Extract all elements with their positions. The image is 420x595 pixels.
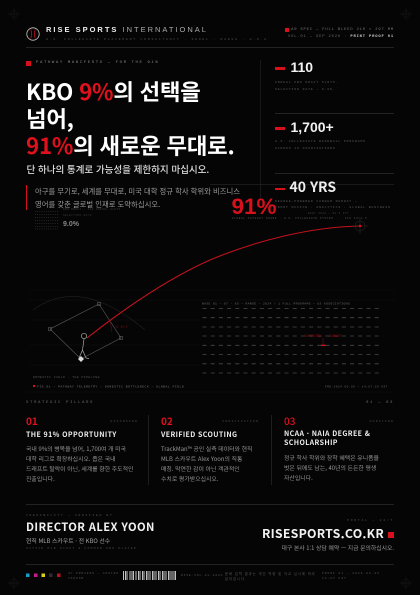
title: KBO 9%의 선택을 [26, 75, 201, 107]
heading left: STRATEGIC PILLARS [26, 401, 94, 405]
body [284, 452, 379, 482]
name: DIRECTOR ALEX YOON [26, 519, 155, 535]
subtitle: 단 하나의 통계로 가능성을 제한하지 마십시오. [26, 162, 209, 176]
description: U.S. COLLEGIATE BASEBALL PROGRAMS [275, 139, 366, 143]
body: 대학 리그로 확장하십시오. 좁은 국내 [26, 454, 116, 463]
diamond [48, 302, 122, 359]
trajectory curve [87, 226, 360, 338]
highlighted label: GOMPUTEL · 91%LOT [304, 334, 342, 338]
footer: process note: 4C PROCESS — COATED [68, 572, 119, 574]
heading: VERIFIED SCOUTING [161, 430, 237, 440]
body: 수치로 평가받으십시오. [161, 474, 218, 483]
footer: serial: RISE-VOL.01-2026 [181, 574, 223, 576]
body: 벗은 뒤에도 남는, 40년의 든든한 평생 [284, 463, 376, 472]
heading: NCAA · NAIA DEGREE & [284, 429, 370, 439]
role korean: 현직 MLB 스카우트 · 전 KBO 선수 [26, 536, 110, 544]
body: 국내 9%의 병목을 넘어, 1,700여 개 미국 [26, 444, 126, 452]
figure caption: FIG.01 — PATHWAY TELEMETRY : DOMESTIC BOTTLENECK → GLOBAL FIELD [37, 384, 184, 388]
number: 03 [284, 413, 295, 428]
description: FRONT OFFICE · ANALYTICS · GLOBAL BUSINESS [275, 205, 391, 209]
description: DEGREE-POWERED CAREER RUNWAY — [275, 199, 358, 203]
chart: baseball diamond and trajectory [33, 218, 368, 388]
tag: DURATION [370, 420, 394, 423]
eyebrow marker [26, 60, 31, 66]
section heading: strategic pillars [26, 400, 394, 405]
title [26, 75, 235, 161]
description: ACROSS 10 ASSOCIATIONS [275, 146, 336, 150]
description [275, 139, 366, 150]
body: TrackMan™ 공인 실측 데이터와 현직 [161, 444, 252, 452]
footer: proof [322, 572, 380, 580]
brand name: RISE SPORTS INTERNATIONAL [46, 25, 208, 34]
red measure label: 12 18.5 [115, 326, 128, 328]
heading right: 01 — 03 [366, 401, 394, 405]
highlighted marker [321, 338, 326, 346]
chart: data dashes grid [202, 302, 388, 388]
batter figure [79, 333, 89, 358]
description [275, 80, 338, 90]
spec line: A0 SPEC — FULL BLEED 210 × 297 MM [291, 28, 394, 32]
grid header: BASE 01 — 07 · 85 — RANGE — 2024 / 1 FULL PROGRAMS — US ASSOCIATIONS [202, 302, 350, 306]
body: 자산입니다. [284, 473, 313, 482]
pillar 03 [284, 413, 394, 482]
value: 40 YRS [290, 177, 336, 197]
spec marker [285, 28, 289, 32]
pillar 02 [161, 413, 259, 483]
quote text [35, 186, 240, 210]
number: 02 [161, 413, 173, 428]
description: SELECTION RATE — 9.0%. [275, 86, 336, 90]
description: ANNUAL KBO DRAFT SLOTS. [275, 80, 338, 84]
footer: barcode [123, 571, 176, 580]
heading: SCHOLARSHIP [284, 438, 338, 448]
header: brand [26, 25, 268, 41]
mini stat: KBO selection [35, 208, 121, 230]
footer: process note: 150GSM [68, 577, 84, 580]
eyebrow: PORTAL — 24/7 [347, 518, 394, 522]
dash [275, 67, 285, 70]
quote text: 영어를 갖춘 글로벌 인재로 도약하십시오. [35, 199, 160, 210]
target crosshair [352, 218, 368, 234]
red measure label [110, 320, 128, 332]
body: 정규 학사 학위와 장학 혜택은 유니폼을 [284, 452, 379, 462]
footer: proof: PROOF 01 — 2026.09.05 [322, 572, 380, 574]
value: 110 [290, 59, 313, 75]
tag: VERIFICATION [222, 420, 259, 423]
url marker [388, 532, 394, 538]
proof line: VOL.01 — SEP 2026 · PRINT PROOF 01 [288, 35, 394, 39]
dash rows [202, 308, 381, 373]
title: 넘어, [26, 102, 74, 134]
quote block [26, 185, 240, 210]
tag: EXPANSION [111, 420, 138, 423]
quote bar [26, 185, 27, 210]
big stat: 91% [232, 194, 367, 220]
timestamp: FRE-2024 00.05 — 14:07:25 KST [325, 386, 388, 388]
brand subline: U.S. COLLEGIATE PLACEMENT CONSULTANCY · SEOUL · DAEGU · U.S.A [46, 36, 268, 40]
icon: baseball logo [26, 27, 40, 41]
dash [275, 188, 285, 190]
quote text: 아구를 무기로, 세계를 무대로, 미국 대학 정규 학사 학위와 비즈니스 [35, 186, 240, 197]
field caption: DOMESTIC FIELD · THE PIPELINE [33, 375, 100, 379]
body [26, 444, 133, 483]
role english: ACTIVE MLB SCOUT & FORMER KBO PLAYER [26, 546, 137, 550]
title: 91%의 새로운 무대로. [26, 129, 235, 161]
mini label 2: SELECTION RATE [63, 214, 92, 216]
mini value: 9.0% [63, 220, 79, 228]
mini label: KBO DRAFT — 110 ANNUAL SLOTS [63, 208, 121, 211]
heading [284, 429, 370, 448]
eyebrow text: PATHWAY MANIFESTO — FOR THE 91% [36, 61, 159, 65]
portal block [262, 518, 394, 552]
body [161, 444, 252, 483]
eyebrow [26, 60, 159, 66]
home plate [78, 356, 84, 362]
header: spec block [285, 28, 394, 39]
big stat caption: GLOBAL PATHWAY SHARE · U.S. COLLEGIATE SYSTEM · FIG 13/1.5 [232, 217, 367, 220]
body: 매칭. 막연한 감이 아닌 객관적인 [161, 464, 240, 473]
big stat note: EASY 2024 — 91.0 PCT [308, 212, 349, 215]
footer: proof: 14:07 KST [322, 577, 347, 580]
heading: THE 91% OPPORTUNITY [26, 430, 117, 440]
footer: process note [68, 572, 119, 580]
pillar 01 [26, 413, 138, 483]
outfield arc [33, 296, 145, 330]
stat: 1,700+ [275, 119, 366, 150]
footer: disclaimer [225, 570, 316, 581]
body: MLB 스카우트 Alex Yoon의 직통 [161, 454, 242, 463]
contact line: 대구 본사 1:1 상담 예약 — 지금 문의하십시오. [282, 543, 394, 552]
eyebrow: CREDIBILITY — VERIFIED BY [26, 514, 114, 516]
dot grid [35, 211, 58, 230]
footer: colour bars [26, 574, 60, 577]
footer: disclaimer: 문화 입학 결과는 개인 역량 및 각교 심사에 따라 [225, 570, 316, 576]
number: 01 [26, 413, 38, 428]
footer: disclaimer: 달라집니다. [225, 576, 247, 581]
stat: 40 YRS [275, 177, 391, 209]
stat: 110 [275, 59, 338, 90]
body: 진출입니다. [26, 474, 55, 483]
url: RISESPORTS.CO.KR [262, 524, 384, 542]
big number: 91% [232, 194, 277, 218]
body: 드래프트 탈락이 아닌, 세계를 향한 주도적인 [26, 464, 133, 473]
dash [275, 127, 285, 130]
credential block [26, 514, 155, 550]
description [275, 199, 391, 209]
value: 1,700+ [290, 119, 334, 135]
